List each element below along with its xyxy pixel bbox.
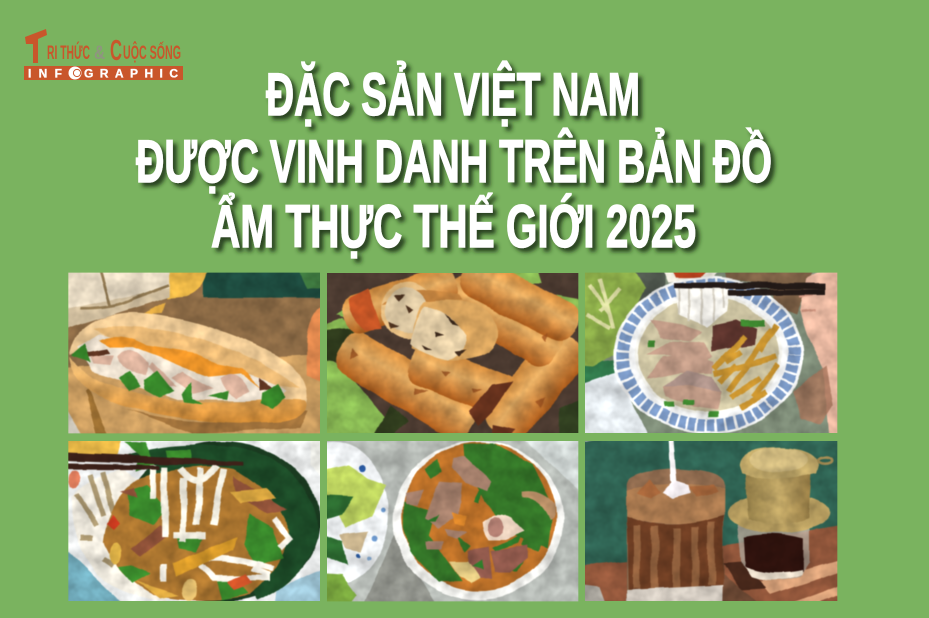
logo infographic bar: INF (28, 66, 62, 80)
photo: bowl of bun with duck and bamboo shoots (585, 272, 838, 433)
logo wordmark: UỘC SỐNG (123, 42, 181, 64)
photo: fried spring rolls (327, 273, 578, 433)
logo wordmark: RI THỨC (47, 42, 90, 64)
logo infographic bar: GRAPHIC (84, 66, 178, 80)
logo: Tri Thuc & Cuoc Song Infographic (24, 29, 183, 80)
logo wordmark (47, 35, 181, 67)
title (136, 61, 772, 260)
logo wordmark: & (94, 43, 105, 64)
photo: banh mi sandwich (68, 272, 320, 434)
photo: Quang noodles with chopsticks (68, 441, 320, 601)
photo: bun bo Hue (327, 441, 578, 602)
title: ĐẶC SẢN VIỆT NAM (266, 61, 640, 128)
title: ẨM THỰC THẾ GIỚI 2025 (211, 193, 696, 260)
icon: roof T mark (25, 29, 47, 63)
photo: Vietnamese iced milk coffee with phin filter (585, 441, 838, 601)
logo infographic bar (24, 66, 183, 80)
logo wordmark: C (110, 35, 122, 67)
